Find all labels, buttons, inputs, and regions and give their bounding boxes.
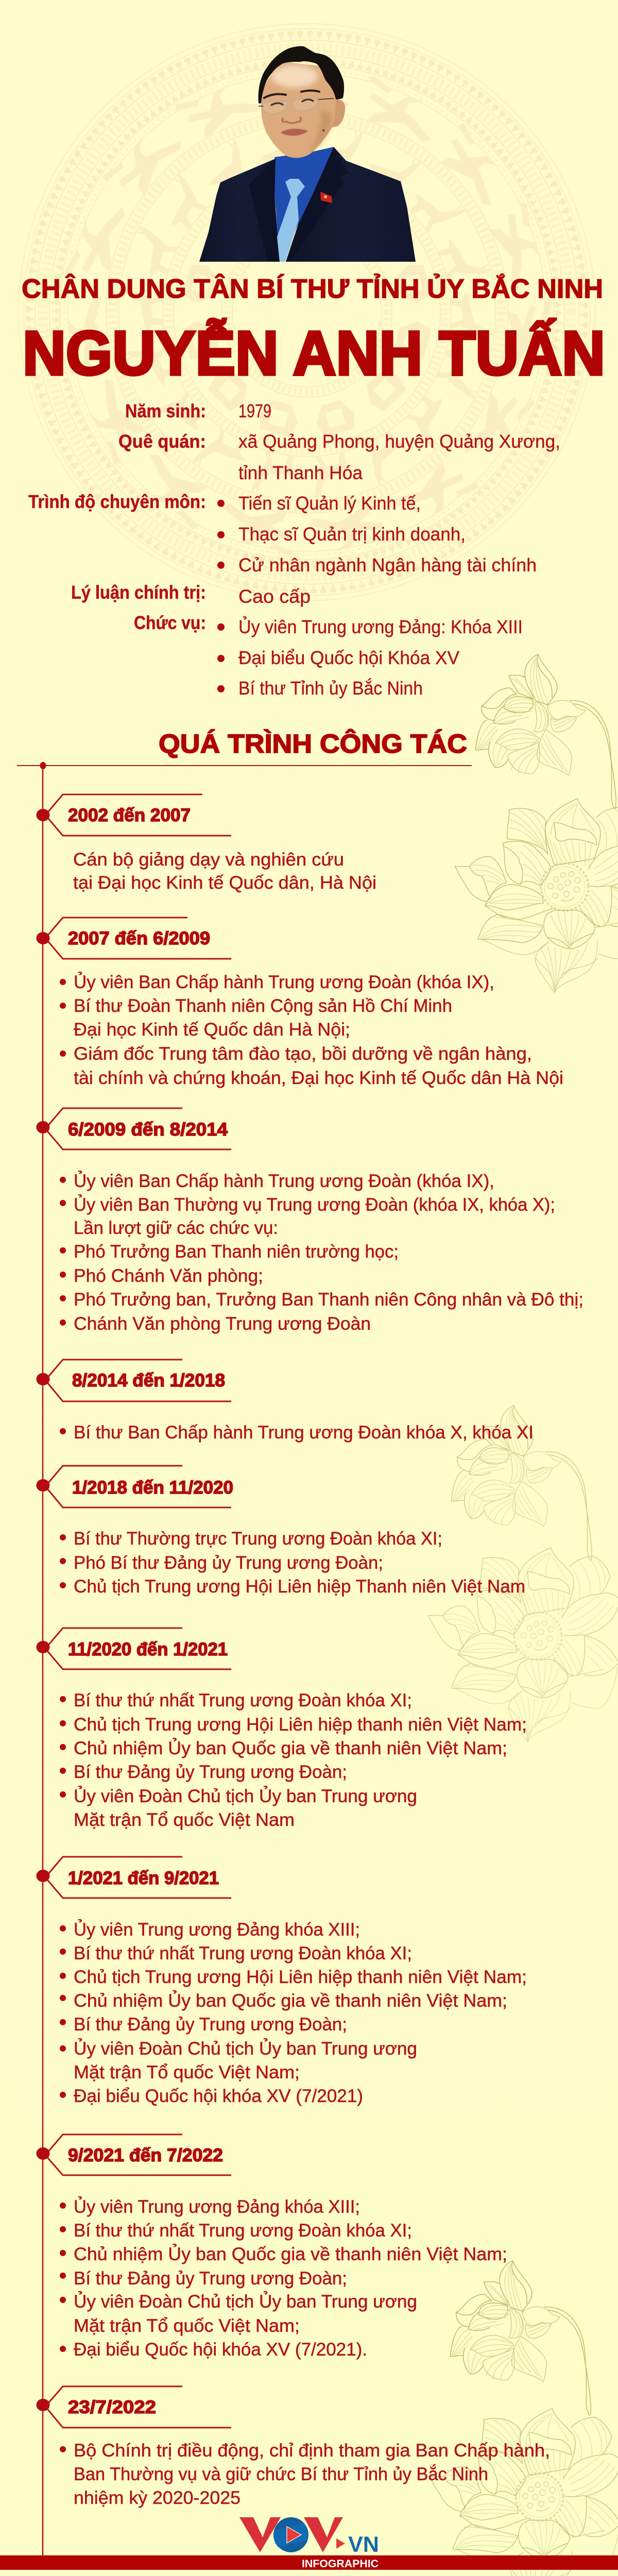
details: nhiệm kỳ 2020-2025 xyxy=(74,2488,241,2508)
forehead highlight xyxy=(271,65,318,88)
details: tại Đại học Kinh tế Quốc dân, Hà Nội xyxy=(73,873,376,893)
title line: CHÂN DUNG TÂN BÍ THƯ TỈNH ỦY BẮC NINH xyxy=(22,274,603,304)
qualifications: Trình độ chuyên môn: xyxy=(28,491,206,512)
birth year: Năm sinh: xyxy=(125,400,206,421)
political theory xyxy=(71,582,311,607)
hometown: tỉnh Thanh Hóa xyxy=(238,462,363,483)
tag xyxy=(36,1360,231,1401)
hometown: xã Quảng Phong, huyện Quảng Xương, xyxy=(238,431,560,452)
qualifications: Tiến sĩ Quản lý Kinh tế, xyxy=(238,493,421,514)
circle highlight xyxy=(273,2523,308,2547)
mouth xyxy=(281,129,308,135)
political theory: Cao cấp xyxy=(238,586,311,607)
positions xyxy=(134,612,523,699)
details: Bí thư Đảng ủy Trung ương Đoàn; xyxy=(74,2014,347,2035)
timeline period: 6/2009 đến 8/2014 xyxy=(36,1108,583,1334)
hometown xyxy=(118,431,560,483)
qualifications: Thạc sĩ Quản trị kinh doanh, xyxy=(238,523,466,545)
timeline period: 2002 đến 2007 xyxy=(36,794,376,893)
qualifications: Cử nhân ngành Ngân hàng tài chính xyxy=(238,554,537,575)
play triangle xyxy=(287,2527,301,2543)
details: Mặt trận Tổ quốc Việt Nam xyxy=(74,1810,295,1830)
personal info block xyxy=(28,400,560,699)
shirt xyxy=(274,147,335,262)
details: Bộ Chính trị điều động, chỉ định tham gia Ban Chấp hành, xyxy=(74,2441,550,2461)
details: Chủ nhiệm Ủy ban Quốc gia về thanh niên Việt Nam; xyxy=(74,1990,507,2011)
tag: 1/2021 đến 9/2021 xyxy=(68,1868,219,1888)
face xyxy=(261,62,336,158)
tag: 11/2020 đến 1/2021 xyxy=(68,1639,228,1659)
positions: Chức vụ: xyxy=(134,612,206,633)
timeline period: 1/2021 đến 9/2021 xyxy=(36,1857,527,2106)
details xyxy=(60,1690,527,1830)
details: Ủy viên Đoàn Chủ tịch Ủy ban Trung ương xyxy=(74,1786,417,1806)
details xyxy=(60,1529,525,1597)
details: Chủ nhiệm Ủy ban Quốc gia về thanh niên Việt Nam; xyxy=(74,1738,507,1758)
lotus: drooping bud, middle xyxy=(451,1405,592,1560)
birth year xyxy=(125,400,271,421)
lotus ornaments, clipped to the page xyxy=(428,654,618,2576)
details: Phó Chánh Văn phòng; xyxy=(74,1266,263,1286)
suit jacket right side xyxy=(286,147,416,262)
timeline period: 11/2020 đến 1/2021 xyxy=(36,1628,527,1830)
lotus: open flower, lower xyxy=(430,2409,618,2576)
tag: 8/2014 đến 1/2018 xyxy=(72,1370,225,1391)
details: Bí thư Đoàn Thanh niên Cộng sản Hồ Chí Minh xyxy=(74,996,452,1016)
lotus: drooping bud, lower xyxy=(450,2261,591,2415)
ear xyxy=(332,99,345,127)
details: Bí thư thứ nhất Trung ương Đoàn khóa XI; xyxy=(74,2221,412,2241)
lotus: open flower, middle xyxy=(428,1548,618,1742)
details: Ủy viên Trung ương Đảng khóa XIII; xyxy=(74,2196,360,2217)
tag xyxy=(36,2386,231,2428)
details: Chủ nhiệm Ủy ban Quốc gia về thanh niên Việt Nam; xyxy=(74,2244,507,2264)
details: Mặt trận Tổ quốc Việt Nam; xyxy=(74,2316,300,2336)
birth year: 1979 xyxy=(238,400,271,421)
timeline axis xyxy=(17,762,472,2555)
tag xyxy=(36,918,231,959)
INFOGRAPHIC text: INFOGRAPHIC xyxy=(302,2558,379,2570)
details: Phó Trưởng Ban Thanh niên trường học; xyxy=(74,1242,399,1262)
tag xyxy=(36,1857,231,1898)
details: Bí thư Đảng ủy Trung ương Đoàn; xyxy=(74,1762,347,1782)
eyebrows xyxy=(264,91,319,98)
details: Đại biểu Quốc hội khóa XV (7/2021) xyxy=(74,2086,363,2106)
tag: 9/2021 đến 7/2022 xyxy=(68,2145,223,2165)
details: tài chính và chứng khoán, Đại học Kinh tế Quốc dân Hà Nội xyxy=(74,1068,563,1088)
details: Chủ tịch Trung ương Hội Liên hiệp Thanh niên Việt Nam xyxy=(74,1577,525,1597)
mole xyxy=(322,129,324,131)
glasses xyxy=(263,98,318,114)
tag: 23/7/2022 xyxy=(68,2397,156,2417)
positions: Bí thư Tỉnh ủy Bắc Ninh xyxy=(238,677,423,699)
details: Ủy viên Đoàn Chủ tịch Ủy ban Trung ương xyxy=(74,2038,417,2059)
details: Bí thư Đảng ủy Trung ương Đoàn; xyxy=(74,2268,347,2289)
details: Bí thư thứ nhất Trung ương Đoàn khóa XI; xyxy=(74,1690,412,1710)
VOV.VN logo xyxy=(239,2517,379,2570)
tag xyxy=(36,1108,231,1149)
details xyxy=(73,850,376,893)
nose xyxy=(282,117,301,123)
timeline period: 1/2018 đến 11/2020 xyxy=(36,1466,525,1597)
tag: 2007 đến 6/2009 xyxy=(68,928,210,948)
details: Ban Thường vụ và giữ chức Bí thư Tỉnh ủy Bắc Ninh xyxy=(74,2464,488,2484)
lotus: drooping bud, upper xyxy=(475,654,616,809)
details xyxy=(60,2196,507,2360)
tag xyxy=(36,794,231,836)
bronze drum background motif xyxy=(19,24,595,601)
details xyxy=(60,1919,527,2106)
details: Đại học Kinh tế Quốc dân Hà Nội; xyxy=(74,1020,350,1040)
glasses arm xyxy=(259,98,334,106)
details: Lần lượt giữ các chức vụ: xyxy=(74,1218,278,1238)
details: Chủ tịch Trung ương Hội Liên hiệp thanh niên Việt Nam; xyxy=(74,1967,527,1987)
tag: 6/2009 đến 8/2014 xyxy=(68,1120,228,1140)
timeline period: 23/7/2022 xyxy=(36,2386,550,2508)
cheek shade xyxy=(309,111,331,154)
tag xyxy=(36,1466,233,1507)
letter V left xyxy=(239,2517,281,2552)
details: Đại biểu Quốc hội khóa XV (7/2021). xyxy=(74,2340,367,2360)
small arrow xyxy=(336,2538,345,2549)
details xyxy=(60,1171,583,1334)
hometown: Quê quán: xyxy=(118,431,206,452)
suit jacket left side xyxy=(199,159,280,262)
political theory: Lý luận chính trị: xyxy=(71,582,206,603)
party flag emblem xyxy=(324,195,327,198)
details xyxy=(60,972,563,1088)
details: Ủy viên Ban Chấp hành Trung ương Đoàn (khóa IX), xyxy=(74,1171,494,1191)
details: Chánh Văn phòng Trung ương Đoàn xyxy=(74,1314,371,1334)
section heading: QUÁ TRÌNH CÔNG TÁC xyxy=(159,728,467,758)
details: Ủy viên Ban Thường vụ Trung ương Đoàn (khóa IX, khóa X); xyxy=(74,1194,555,1215)
details: Giám đốc Trung tâm đào tạo, bồi dưỡng về ngân hàng, xyxy=(74,1044,532,1064)
lapel shading xyxy=(249,148,349,262)
details: Ủy viên Ban Chấp hành Trung ương Đoàn (khóa IX), xyxy=(74,972,494,992)
timeline period: 8/2014 đến 1/2018 xyxy=(36,1360,534,1443)
details: Bí thư thứ nhất Trung ương Đoàn khóa XI; xyxy=(74,1943,412,1963)
details: Phó Trưởng ban, Trưởng Ban Thanh niên Công nhân và Đô thị; xyxy=(74,1290,583,1310)
timeline period: 9/2021 đến 7/2022 xyxy=(36,2134,507,2360)
timeline period: 2007 đến 6/2009 xyxy=(36,918,563,1088)
lotus: open flower, upper xyxy=(455,799,618,993)
details xyxy=(60,2441,550,2508)
eyes xyxy=(271,99,313,105)
letter V right xyxy=(304,2517,343,2552)
name: NGUYỄN ANH TUẤN xyxy=(23,318,605,388)
positions: Ủy viên Trung ương Đảng: Khóa XIII xyxy=(238,616,523,637)
tie xyxy=(277,179,305,262)
details: Bí thư Ban Chấp hành Trung ương Đoàn khóa X, khóa XI xyxy=(74,1422,534,1443)
qualifications xyxy=(28,491,537,575)
details: Mặt trận Tổ quốc Việt Nam; xyxy=(74,2062,300,2082)
positions: Đại biểu Quốc hội Khóa XV xyxy=(238,647,459,668)
details: Ủy viên Đoàn Chủ tịch Ủy ban Trung ương xyxy=(74,2291,417,2312)
VN text: VN xyxy=(348,2532,379,2557)
letter O as play circle xyxy=(273,2517,308,2552)
party flag pin xyxy=(320,192,332,203)
hair xyxy=(259,46,344,104)
details: Phó Bí thư Đảng ủy Trung ương Đoàn; xyxy=(74,1553,383,1573)
tag xyxy=(36,2134,231,2175)
details: Chủ tịch Trung ương Hội Liên hiệp thanh niên Việt Nam; xyxy=(74,1715,527,1735)
tag: 2002 đến 2007 xyxy=(68,805,191,825)
footer bar xyxy=(0,2555,618,2570)
tag: 1/2018 đến 11/2020 xyxy=(72,1478,233,1498)
portrait of Nguyễn Anh Tuấn xyxy=(199,46,416,262)
details: Bí thư Thường trực Trung ương Đoàn khóa XI; xyxy=(74,1529,442,1549)
details: Ủy viên Trung ương Đảng khóa XIII; xyxy=(74,1919,360,1940)
tag xyxy=(36,1628,231,1669)
details: Cán bộ giảng dạy và nghiên cứu xyxy=(73,850,344,870)
